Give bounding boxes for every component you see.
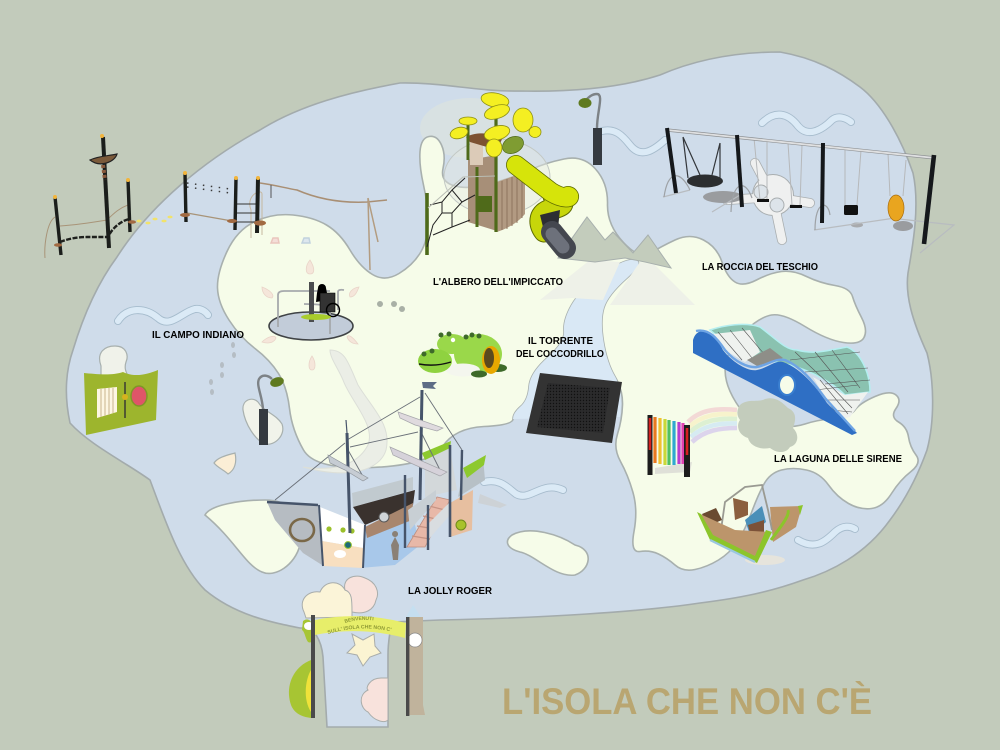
front green rim [697, 512, 772, 563]
platforms [54, 213, 266, 247]
head [418, 349, 452, 373]
bow panel edge [319, 505, 365, 568]
xylophone [650, 415, 692, 477]
crocodile tail shape [303, 350, 387, 473]
bow ring [290, 519, 314, 541]
grey cloud [737, 398, 797, 452]
wave: south-east [798, 527, 855, 545]
gooseneck [258, 376, 272, 409]
posts [311, 615, 315, 718]
wave: campo indiano [118, 309, 208, 322]
skull bones fill [727, 163, 810, 240]
mid green [422, 441, 451, 460]
stern mid panel [425, 448, 457, 497]
shower: west [258, 375, 285, 445]
flat seats [757, 199, 769, 202]
title: L'ISOLA CHE NON C'È [502, 681, 872, 722]
land: pale blob behind tree [420, 98, 520, 158]
head [578, 98, 592, 108]
front seat [702, 508, 722, 526]
bumps [422, 332, 487, 378]
clock tower [409, 617, 425, 715]
leaf disc [500, 133, 526, 157]
tower back [468, 155, 497, 231]
green panel [478, 196, 492, 212]
stepping mushrooms [136, 216, 173, 224]
wave: north-east [762, 115, 851, 132]
chain bridge [60, 219, 130, 242]
basket ropes [683, 137, 720, 178]
mountain: grey peaks [558, 217, 671, 268]
hull interior [353, 490, 415, 525]
island sea [66, 52, 933, 727]
column [259, 409, 268, 445]
red dome [131, 386, 147, 406]
arch frame [250, 192, 262, 238]
slide: dark back [540, 210, 560, 235]
orange seat [888, 195, 904, 221]
wheel [326, 304, 340, 316]
barrel stripes [502, 173, 522, 230]
gooseneck [584, 94, 600, 128]
net grid [718, 328, 870, 418]
skull and bones [727, 163, 810, 240]
wave: south-east inner [798, 527, 855, 545]
stern porthole [456, 520, 466, 530]
crocodile tunnel [418, 332, 507, 378]
net [427, 178, 475, 247]
left post red [649, 418, 651, 450]
clock [408, 633, 422, 647]
blob behind left shower [243, 399, 283, 444]
back hull [770, 506, 802, 542]
hull wood [365, 503, 413, 538]
rocking boat [697, 485, 803, 565]
net climber [693, 324, 870, 435]
rails [278, 290, 344, 334]
land: small southern islet [507, 531, 588, 575]
wave: campo indiano inner [118, 309, 208, 322]
posts [667, 128, 934, 244]
shadows [703, 191, 743, 203]
green seat [301, 314, 331, 320]
skull head outline [752, 174, 794, 216]
blob behind panel [100, 346, 128, 376]
mouth [419, 362, 451, 365]
slide: lower tube [540, 196, 563, 232]
tower spire [406, 605, 421, 617]
chime lines [101, 388, 113, 417]
bench [748, 520, 764, 541]
land: main island [217, 136, 918, 570]
sail: fore [328, 455, 368, 481]
skull head fill [753, 175, 793, 215]
wheelchair [320, 293, 335, 312]
panel ball [345, 542, 351, 548]
zip line [260, 183, 387, 202]
small steps [271, 238, 310, 243]
mountain: pale right [610, 262, 695, 305]
stern green [463, 455, 486, 478]
panel skull [334, 550, 346, 558]
toddler seat [844, 205, 858, 215]
shadow water [360, 505, 420, 568]
beam [667, 130, 935, 158]
pole lights [53, 134, 260, 199]
label: L'albero dell'impiccato: L'ALBERO DELL'IMPICCATO [433, 277, 563, 288]
front hull [698, 513, 770, 562]
flag [422, 382, 437, 389]
head [269, 375, 285, 389]
rainbow [688, 409, 737, 442]
trampoline panel [526, 373, 622, 443]
land: left lobe [205, 500, 301, 573]
body [454, 334, 502, 374]
stair railing [408, 490, 436, 530]
carousel with wheelchair [269, 282, 353, 340]
bead [122, 394, 128, 400]
blue top highlight [696, 331, 855, 431]
panel dots [326, 526, 355, 534]
slide: dark exit highlight [552, 234, 563, 247]
hanging ropes [754, 138, 906, 205]
brow [437, 334, 467, 354]
platform [269, 312, 353, 340]
shell [214, 453, 236, 474]
belly [446, 364, 480, 376]
slide: upper tube fill [516, 165, 569, 197]
right post red [686, 428, 688, 455]
wave: north-east inner [762, 115, 851, 132]
crow's nest [90, 154, 117, 164]
slide tower: L'albero dell'impiccato [427, 91, 569, 255]
wave: stern inner [484, 481, 563, 496]
arch legs [664, 176, 830, 230]
curved barrel [497, 172, 525, 232]
cream cloud [302, 583, 353, 618]
stern upper [458, 457, 485, 497]
sign white [304, 622, 314, 630]
slide: dark exit [552, 232, 565, 248]
rope course [45, 134, 387, 270]
bars [655, 417, 683, 465]
poles [55, 137, 258, 255]
frame [721, 485, 772, 530]
label: La laguna delle sirene: LA LAGUNA DELLE SIRENE [774, 454, 902, 465]
left creature [289, 660, 311, 718]
grey plate [747, 348, 783, 366]
right post [406, 617, 409, 716]
banner text: BENVENUTI [344, 616, 374, 623]
teal back [710, 324, 870, 395]
rigging [275, 393, 462, 500]
banner [315, 616, 406, 638]
hole [779, 375, 795, 395]
stairs [407, 497, 450, 547]
column [593, 128, 602, 165]
activity panel [84, 370, 158, 435]
slide: lower tube fill [540, 196, 563, 232]
bow panel white [320, 507, 365, 548]
keel blue [710, 540, 755, 562]
bow hull grey [267, 502, 322, 565]
board [84, 370, 158, 435]
wave: near shower inner [602, 130, 665, 152]
label: Il torrente: IL TORRENTE [528, 336, 593, 347]
mountains [540, 217, 695, 305]
star [347, 634, 381, 666]
blue wave body [693, 331, 857, 435]
left creature inner [306, 670, 311, 712]
chimes [97, 387, 117, 418]
stairs steps [412, 506, 445, 539]
tail [489, 364, 507, 372]
swing set [663, 128, 954, 253]
blue seat [745, 506, 766, 535]
shadow [655, 462, 692, 474]
rear slide [478, 494, 507, 508]
label: La roccia del teschio: LA ROCCIA DEL TESCHIO [702, 262, 818, 273]
welcome gate [288, 576, 425, 722]
frame [526, 373, 622, 443]
footprints [209, 342, 236, 395]
hanging bridge [187, 183, 237, 190]
upper brown deck [466, 133, 503, 150]
beads [124, 382, 126, 418]
person silhouette [391, 531, 399, 560]
skull eyes [754, 185, 768, 199]
stair railing right [428, 502, 450, 540]
skull outline [727, 163, 810, 240]
label: Il campo indiano: IL CAMPO INDIANO [152, 330, 244, 341]
left sign [302, 619, 313, 643]
pink cloud lower [361, 678, 388, 721]
shower: north [578, 94, 602, 165]
hull rail [352, 477, 413, 507]
rear seat [733, 498, 748, 520]
wave: near shower [602, 130, 665, 152]
left post [648, 415, 652, 475]
bow panel peach [322, 541, 363, 568]
label: del coccodrillo: DEL COCCODRILLO [516, 349, 604, 360]
back rim tip [798, 505, 803, 515]
grab rope [428, 176, 495, 208]
tunnel hole [482, 346, 500, 374]
sail: aft upper [398, 412, 443, 431]
person silhouette [316, 284, 329, 302]
nest swing [687, 174, 723, 188]
pale ring behind tree [444, 139, 550, 215]
ground shadow lines [663, 190, 954, 253]
eye [451, 338, 455, 342]
pink cloud [345, 576, 378, 613]
posts [427, 117, 496, 255]
ear marks around carousel [262, 260, 359, 370]
river [513, 260, 639, 419]
banner text second line: SULL' ISOLA CHE NON C' È [328, 624, 392, 634]
right post [684, 425, 690, 477]
cream slats [470, 138, 483, 165]
ropes [45, 217, 55, 258]
stern hull [450, 490, 473, 537]
mountain: pale left [540, 260, 620, 300]
stones [377, 301, 405, 312]
sail: aft lower [390, 447, 447, 476]
white net [713, 330, 868, 420]
mat [537, 383, 610, 433]
leaves [449, 91, 541, 157]
central post [309, 282, 314, 322]
shadow [745, 555, 785, 565]
beam highlight [667, 130, 935, 158]
wave: stern [484, 481, 563, 496]
porthole [379, 512, 389, 522]
slide: upper tube [516, 165, 569, 197]
masts and posts [267, 390, 462, 550]
label: La Jolly Roger: LA JOLLY ROGER [408, 586, 493, 597]
pirate ship: La Jolly Roger [267, 382, 507, 568]
back green rim [771, 510, 788, 540]
tunnel dark [484, 348, 494, 368]
